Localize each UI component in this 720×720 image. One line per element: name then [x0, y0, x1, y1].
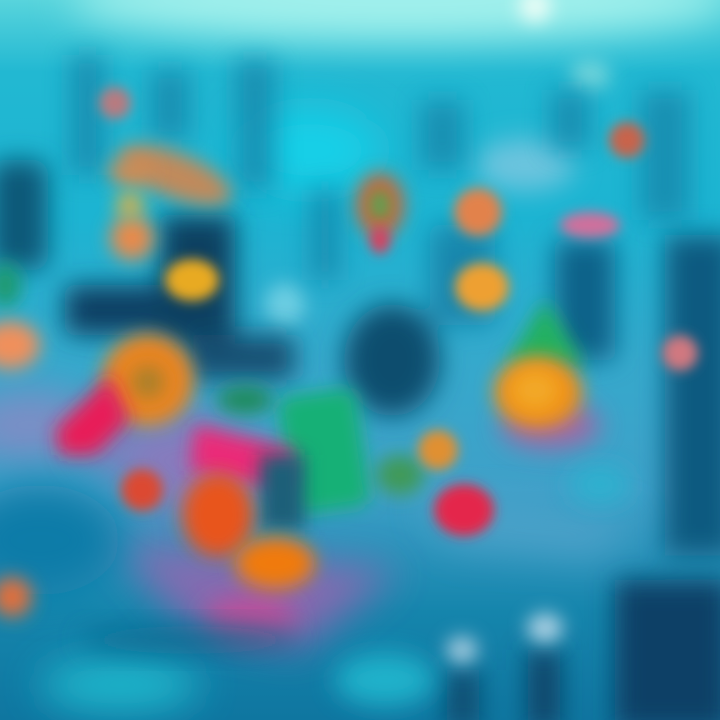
icon: pink and orange stack	[182, 425, 315, 589]
icon: orange wheel and red block	[55, 334, 194, 455]
dark buildings centre	[344, 225, 615, 416]
icon: map pin	[356, 173, 404, 254]
pale highlights by lower figures	[446, 613, 563, 664]
icon: green block	[217, 386, 424, 515]
dark buildings left	[0, 160, 295, 380]
icon: small red and orange balls	[121, 430, 494, 536]
icon: small red markers	[99, 87, 698, 371]
icon: green and orange dome	[494, 300, 585, 428]
sky glow	[70, 0, 720, 327]
lower teal ground	[0, 467, 630, 711]
distant skyline	[70, 55, 690, 280]
icon: orange balloons	[454, 188, 509, 311]
icon: striped roof building	[108, 132, 239, 301]
pink and purple ground	[0, 391, 640, 650]
icon: left edge markers	[0, 263, 40, 617]
dark buildings right	[447, 235, 720, 720]
